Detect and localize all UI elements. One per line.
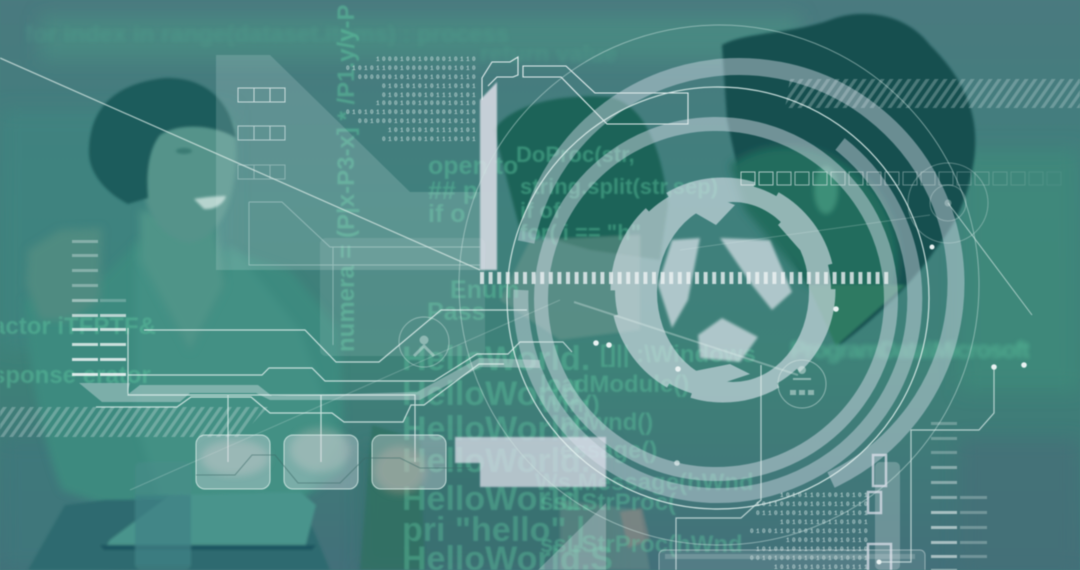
code block center top: if o (428, 200, 466, 228)
icon: people circle right (778, 360, 826, 408)
binary block bottom: 1011001001010110110 (756, 501, 870, 508)
hello world block: HelloWorld. (402, 375, 590, 413)
code block center top: ## p (428, 177, 478, 205)
outline: notched frame (249, 202, 480, 345)
smile (194, 196, 226, 209)
binary block top: 00100010101010010110 (358, 118, 478, 125)
code block center top (427, 142, 718, 326)
binary block top: 00000010101010010110 (358, 74, 478, 81)
bottom right rounded frame (659, 550, 925, 570)
box mini line chart (196, 455, 470, 483)
three rounded boxes (196, 435, 446, 489)
faded code top (25, 21, 617, 68)
thin bright circle (507, 87, 929, 509)
photo: man on the right (722, 14, 975, 346)
right code block (535, 341, 756, 558)
code block center top: Enum (450, 276, 519, 304)
hatched band left (0, 407, 268, 437)
outer band arc (526, 66, 956, 480)
panel: diagonal bottom bar (538, 503, 606, 570)
vertical code: numera = (P|x-P3-x] * /P1.y/y-P (333, 4, 360, 352)
binary block top: 0101000101110101 (382, 92, 478, 99)
neck (140, 210, 225, 352)
right code block: Ws.Message(hWnd (535, 469, 754, 496)
right code block: Win() (540, 391, 600, 418)
bar list left (72, 240, 126, 376)
code block center top: for( i == "h" (520, 220, 641, 245)
binary block top: 10001001000010110 (376, 56, 478, 63)
outlined rectangles bottom right (868, 455, 891, 570)
circuit lines (96, 310, 540, 462)
bar list right (931, 422, 987, 570)
code block center top: if of (520, 198, 561, 223)
panel: side panel bottom right (875, 462, 900, 570)
raised fist (26, 228, 102, 320)
binary block top: 0101011001000010001010 (346, 65, 478, 72)
squares row (741, 172, 1061, 185)
hello world block: pri "hello" | (402, 511, 585, 549)
left code lines (0, 313, 156, 389)
binary block top: 0101010101110101 (382, 83, 478, 90)
diagonal light rays (0, 58, 1032, 490)
hello world block: HelloWorld. (402, 442, 590, 480)
HUD dial: gear (613, 180, 833, 400)
code block center top: string.split(str,sep) (520, 174, 718, 199)
right code block: ssLStrProc(hWnd (540, 531, 743, 558)
dash strip (480, 272, 892, 284)
eye (176, 148, 192, 154)
code block center top: DoProc(str, (516, 142, 635, 167)
binary block top (346, 56, 478, 143)
middle band arc (521, 144, 915, 496)
outer thin circle (459, 25, 979, 545)
hello world block: HelloWorld. (402, 410, 590, 448)
faded code top: for index in range(dataset.items) : process (25, 21, 509, 48)
right code block: ssLStrProc( (540, 489, 676, 516)
HUD dial: gear inner blades (658, 238, 792, 362)
icon: people circle left (399, 317, 449, 367)
broad circuit band (79, 358, 540, 402)
blazer and arm (24, 240, 345, 505)
binary block bottom (750, 492, 870, 570)
faded code top: return value (480, 41, 617, 68)
right code block: []|| :\Windows (600, 341, 756, 368)
icon: target (908, 163, 988, 243)
code block center top: Pass (427, 298, 485, 326)
hello world block: HelloWorld. (402, 480, 590, 518)
hello world block (402, 340, 613, 570)
connector lines bottom right (540, 342, 994, 570)
binary block bottom: 101011101101001 (780, 519, 870, 526)
right code block: loadModule() (540, 371, 689, 398)
bar inside bottom frame (665, 554, 915, 559)
binary block top: 0101000101110101 (382, 136, 478, 143)
code block center top: open to (428, 152, 518, 180)
photo: woman on the left (24, 78, 345, 505)
photo: middle person (494, 96, 668, 570)
binary block bottom: 101011010010101 (780, 492, 870, 499)
hatched band right (785, 79, 1080, 108)
binary block bottom: 1010010111010101110 (756, 546, 870, 553)
right code block: essage() (560, 437, 657, 464)
inner band (541, 124, 891, 474)
right code block: ndwnd() (560, 409, 653, 436)
binary block bottom: 0110100101010101101 (756, 510, 870, 517)
panel: vertical bright bar (480, 82, 497, 270)
blurred code band: ProgramData\Microsoft (790, 337, 1030, 364)
squares: three rows (238, 88, 285, 179)
binary block top: 0101011001000010001010 (346, 109, 478, 116)
shirt (135, 238, 340, 500)
hair (89, 78, 236, 204)
panel: angled translucent panel (216, 55, 480, 270)
nodes (593, 244, 1027, 564)
binary block top: 101010101110101 (388, 127, 478, 134)
panel: bright bottom block (455, 437, 606, 487)
hands under the boxes (201, 428, 426, 494)
binary block bottom: 10001010010110 (786, 537, 870, 544)
HUD dial: concentric rings (459, 25, 979, 545)
binary block bottom: 01001101001010111010 (750, 528, 870, 535)
binary block top: 10001001000010110 (376, 100, 478, 107)
photo: table and clipboard (28, 425, 425, 570)
hello world block: HelloWorld. (402, 340, 590, 378)
binary block bottom: 00101001010101010101 (750, 555, 870, 562)
face (142, 109, 236, 242)
panel: lower translucent panel (320, 238, 485, 356)
frame: top connector shapes (482, 57, 688, 124)
